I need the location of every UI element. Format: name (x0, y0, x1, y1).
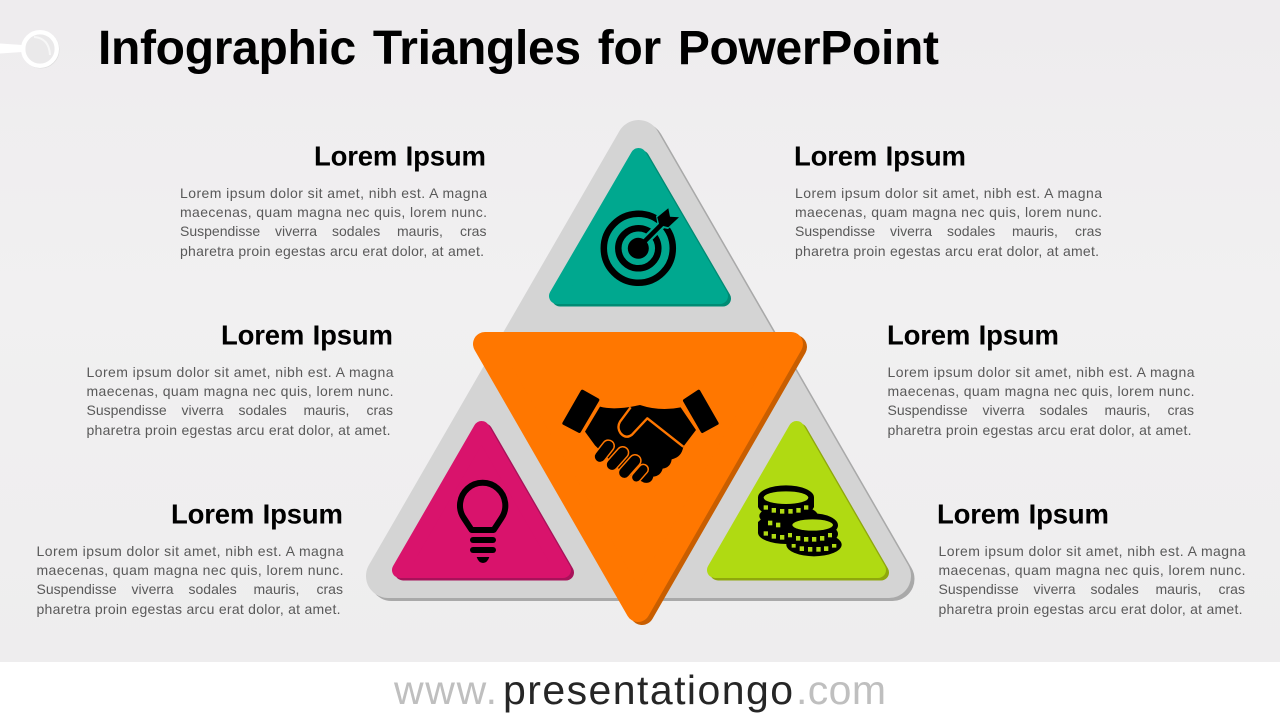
text block: middle left: cras (366, 402, 393, 418)
text block: bottom left: cras (316, 581, 343, 597)
text block: bottom right: mauris, (1156, 581, 1201, 597)
text block: bottom right: cras (1218, 581, 1245, 597)
text block: bottom right: pharetra proin egestas arcu erat dolor, at amet. (938, 601, 1242, 617)
text block: middle left: sodales (238, 402, 287, 418)
icon: target (604, 206, 682, 283)
triangle diagram (388, 142, 892, 613)
text block: top right: viverra (890, 223, 932, 239)
text block: top left: maecenas, quam magna nec quis, lorem nunc. (180, 204, 487, 220)
text block: bottom left (36, 498, 344, 617)
panel: teal triangle (557, 156, 723, 298)
text block: bottom left: Lorem ipsum dolor sit amet, nibh est. A magna (36, 543, 344, 559)
text block: middle left: mauris, (304, 402, 349, 418)
icon: white pin (0, 32, 58, 66)
text block: middle right: sodales (1040, 402, 1088, 418)
text block: middle left: Suspendisse (86, 402, 167, 418)
text block: middle left: Lorem ipsum dolor sit amet, nibh est. A magna (86, 364, 394, 380)
icon: light bulb (460, 483, 505, 563)
text block: top right: mauris, (1012, 223, 1058, 239)
panel: green triangle (715, 429, 881, 572)
text block: top left: pharetra proin egestas arcu erat dolor, at amet. (180, 243, 484, 259)
panel: orange triangle (485, 344, 795, 613)
footer url: www. (393, 667, 497, 713)
text block: top left: sodales (332, 223, 380, 239)
text block: middle right: Suspendisse (888, 402, 968, 418)
text block: middle left: Lorem Ipsum (221, 320, 393, 350)
text block: middle right: viverra (982, 402, 1025, 418)
text block: top left (180, 140, 487, 259)
text block: bottom left: sodales (188, 581, 237, 597)
text block: middle left (86, 320, 394, 438)
text block: middle left: viverra (182, 402, 224, 418)
text block: bottom right (937, 498, 1246, 617)
icon: handshake (564, 391, 717, 483)
text block: top left: mauris, (397, 223, 443, 239)
text block: middle left: pharetra proin egestas arcu erat dolor, at amet. (86, 422, 390, 438)
text block: bottom left: mauris, (254, 581, 299, 597)
text block: bottom right: Lorem Ipsum (937, 498, 1109, 530)
text block: bottom right: Lorem ipsum dolor sit amet, nibh est. A magna (938, 543, 1246, 559)
footer url: presentationgo (503, 667, 793, 713)
text block: top right: maecenas, quam magna nec quis, lorem nunc. (795, 204, 1102, 220)
title: Infographic Triangles for PowerPoint (98, 22, 939, 75)
text block: top right (794, 140, 1102, 259)
footer url (393, 667, 886, 713)
text block: top left: Suspendisse (180, 223, 260, 239)
text block: top right: sodales (947, 223, 995, 239)
text block: top left: viverra (275, 223, 317, 239)
text block: bottom left: maecenas, quam magna nec quis, lorem nunc. (36, 562, 344, 578)
text block: middle left: maecenas, quam magna nec quis, lorem nunc. (86, 383, 394, 399)
text block: top right: pharetra proin egestas arcu erat dolor, at amet. (795, 243, 1099, 259)
icon: coins (758, 485, 842, 556)
text block: bottom left: Suspendisse (36, 581, 117, 597)
text block: middle right: Lorem ipsum dolor sit amet, nibh est. A magna (888, 364, 1195, 380)
text block: bottom right: sodales (1090, 581, 1139, 597)
text block: top left: cras (460, 223, 486, 239)
text block: bottom right: viverra (1034, 581, 1076, 597)
text block: top left: Lorem Ipsum (314, 140, 486, 172)
text block: top right: Lorem ipsum dolor sit amet, nibh est. A magna (795, 185, 1102, 201)
text block: middle right: maecenas, quam magna nec quis, lorem nunc. (888, 383, 1194, 399)
panel: pink triangle (400, 429, 566, 572)
panel: outer grey triangle (388, 142, 892, 579)
text block: bottom left: viverra (132, 581, 174, 597)
text block: top right: cras (1075, 223, 1101, 239)
text block: middle right: cras (1168, 402, 1194, 418)
text block: bottom right: maecenas, quam magna nec quis, lorem nunc. (938, 562, 1246, 578)
text block: bottom right: Suspendisse (938, 581, 1019, 597)
text block: top right: Lorem Ipsum (794, 140, 966, 172)
text block: middle right (887, 320, 1195, 438)
text block: top left: Lorem ipsum dolor sit amet, nibh est. A magna (180, 185, 487, 201)
footer url: .com (796, 667, 886, 713)
text block: bottom left: Lorem Ipsum (171, 498, 343, 530)
text block: bottom left: pharetra proin egestas arcu erat dolor, at amet. (36, 601, 340, 617)
text block: middle right: mauris, (1104, 402, 1150, 418)
text block: top right: Suspendisse (795, 223, 875, 239)
text block: middle right: pharetra proin egestas arcu erat dolor, at amet. (888, 422, 1192, 438)
text block: middle right: Lorem Ipsum (887, 320, 1059, 350)
